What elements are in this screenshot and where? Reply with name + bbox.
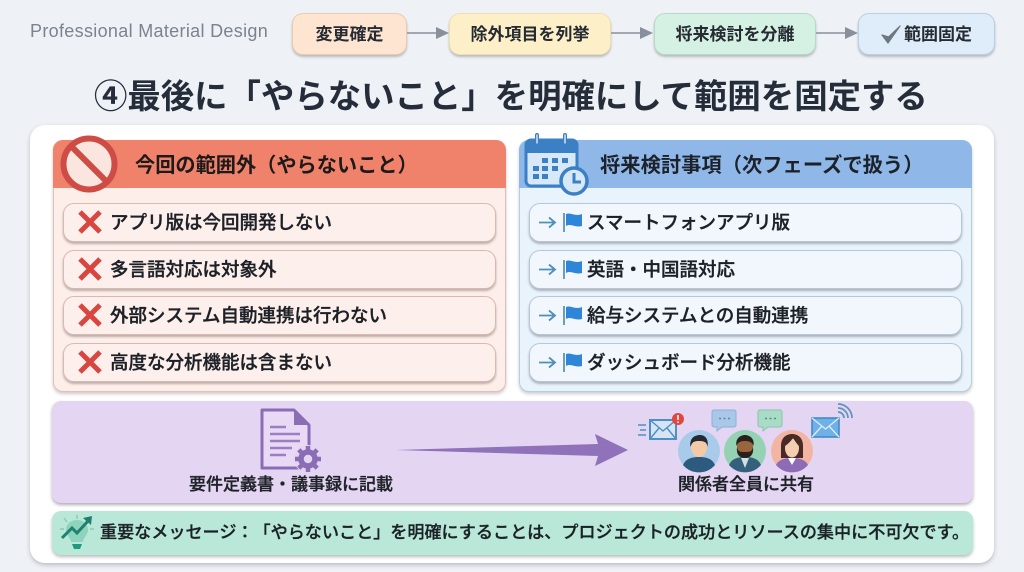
brand label: Professional Material Design <box>30 21 268 41</box>
icon: arrow and flag <box>539 306 582 325</box>
icon: cross <box>78 303 102 327</box>
icon: calendar with clock <box>524 133 589 196</box>
icon: arrow and flag <box>539 353 582 372</box>
icon: arrow and flag <box>539 213 582 232</box>
item: no external integration <box>63 296 496 335</box>
item: English and Chinese <box>529 250 962 289</box>
item: dashboard analytics: ダッシュボード分析機能 <box>587 352 791 373</box>
arrow: document to stakeholders <box>398 434 628 466</box>
arrow: step 2 to 3 <box>611 27 653 39</box>
icon: green chat bubble <box>758 410 782 432</box>
step: list exclusions <box>449 13 611 55</box>
item: dashboard analytics <box>529 343 962 382</box>
step: separate future items <box>654 13 816 55</box>
icon: prohibited sign <box>60 136 118 192</box>
panel: future considerations <box>519 140 972 392</box>
item: English and Chinese: 英語・中国語対応 <box>587 259 735 280</box>
icon: document with gear <box>260 408 321 472</box>
arrow: step 3 to 4 <box>816 27 858 39</box>
icon: stakeholder man <box>678 430 720 472</box>
label: shared with stakeholders: 関係者全員に共有 <box>678 475 814 494</box>
icon: email sending <box>811 403 853 438</box>
panel: out of scope <box>53 140 506 392</box>
arrow: step 1 to 2 <box>407 27 449 39</box>
panel header: future considerations <box>519 140 972 188</box>
item: payroll integration: 給与システムとの自動連携 <box>587 305 808 326</box>
item: no advanced analytics: 高度な分析機能は含まない <box>110 352 332 373</box>
title: ④最後に「やらないこと」を明確にして範囲を固定する <box>94 79 928 116</box>
icon: stakeholder woman <box>771 430 813 472</box>
item: smartphone app: スマートフォンアプリ版 <box>587 212 790 233</box>
item: payroll integration <box>529 296 962 335</box>
icon: blue chat bubble <box>712 410 736 432</box>
item: no app: アプリ版は今回開発しない <box>110 212 332 233</box>
panel: key message <box>52 511 973 555</box>
icon: cross <box>78 210 102 234</box>
process flow <box>291 13 996 58</box>
item: smartphone app <box>529 203 962 242</box>
message text: 重要なメッセージ：「やらないこと」を明確にすることは、プロジェクトの成功とリソースの集中に不可欠です。 <box>100 523 969 542</box>
item: no app <box>63 203 496 242</box>
item: no multilanguage: 多言語対応は対象外 <box>110 259 277 280</box>
panel header: future considerations: 将来検討事項（次フェーズで扱う） <box>600 155 924 177</box>
step: separate future items: 将来検討を分離 <box>676 25 794 44</box>
step: change confirmed: 変更確定 <box>316 25 384 44</box>
icon: email alert <box>638 413 684 440</box>
panel header: out of scope <box>53 140 506 188</box>
step: change confirmed <box>292 13 407 55</box>
item: no external integration: 外部システム自動連携は行わない <box>110 305 387 326</box>
item: no advanced analytics <box>63 343 496 382</box>
icon: arrow and flag <box>539 260 582 279</box>
icon: stakeholder bearded man <box>724 430 766 472</box>
label: recorded in documents: 要件定義書・議事録に記載 <box>189 475 393 494</box>
step: scope fixed <box>858 13 995 55</box>
item: no multilanguage <box>63 250 496 289</box>
icon: check mark <box>881 25 901 44</box>
icon: light bulb with growth arrow <box>60 515 94 549</box>
main card <box>30 125 994 563</box>
step: list exclusions: 除外項目を列挙 <box>470 25 590 44</box>
icon: cross <box>78 350 102 374</box>
panel: documentation and sharing <box>52 401 973 503</box>
step: scope fixed: 範囲固定 <box>904 25 972 44</box>
panel header: out of scope: 今回の範囲外（やらないこと） <box>135 155 418 177</box>
icon: cross <box>78 257 102 281</box>
